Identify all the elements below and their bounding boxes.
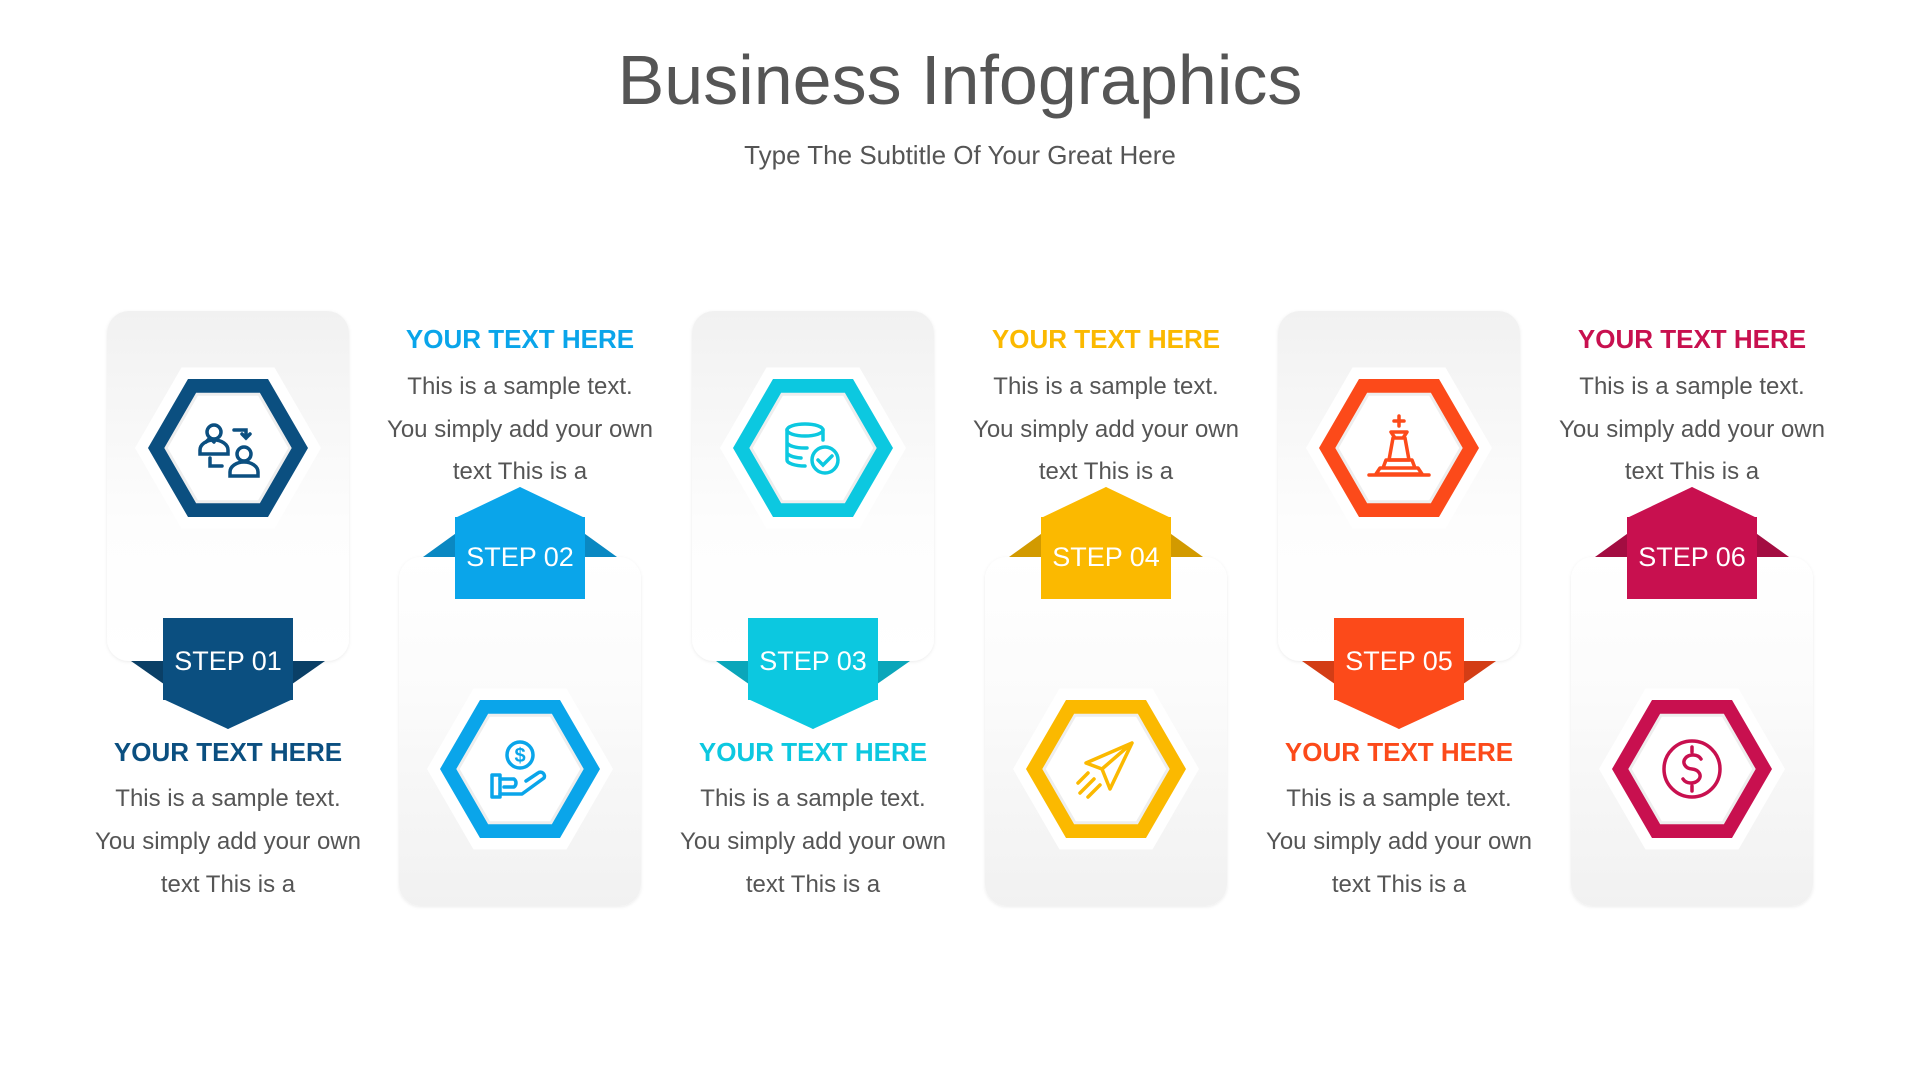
icon: people exchange [200, 425, 258, 476]
text block: text This is a [746, 871, 881, 898]
icon: paper plane [1078, 743, 1132, 797]
text block: This is a sample text. [1579, 373, 1805, 400]
step banner up [1009, 487, 1203, 599]
card [692, 311, 934, 661]
text block: This is a sample text. [700, 785, 926, 812]
text block: You simply add your own [387, 416, 653, 443]
text block: You simply add your own [1266, 828, 1532, 855]
step banner down: STEP 05 [1345, 646, 1453, 676]
text block: You simply add your own [973, 416, 1239, 443]
step banner up [423, 487, 617, 599]
card [985, 557, 1227, 906]
step banner up: STEP 06 [1638, 542, 1746, 572]
panel: step 01 [95, 311, 361, 898]
text block [1266, 737, 1532, 898]
card [1278, 311, 1520, 661]
text block: This is a sample text. [1286, 785, 1512, 812]
panel: step 05 [1266, 311, 1532, 898]
step banner up: STEP 02 [466, 542, 574, 572]
text block: This is a sample text. [115, 785, 341, 812]
text block: This is a sample text. [407, 373, 633, 400]
step banner down: STEP 03 [759, 646, 867, 676]
text block: text This is a [1039, 458, 1174, 485]
subtitle: Type The Subtitle Of Your Great Here [744, 140, 1176, 170]
hexagon icon frame [1013, 688, 1199, 850]
hexagon icon frame [1599, 688, 1785, 850]
icon: hand with coin: $ [514, 745, 526, 767]
text block: text This is a [1625, 458, 1760, 485]
panel: step 02 [387, 324, 653, 906]
text block [680, 737, 946, 898]
step banner up: STEP 04 [1052, 542, 1160, 572]
text block: text This is a [1332, 871, 1467, 898]
card [399, 557, 641, 906]
text block: YOUR TEXT HERE [1285, 737, 1513, 767]
text block [1559, 324, 1825, 485]
step banner down [716, 618, 910, 729]
text block: YOUR TEXT HERE [114, 737, 342, 767]
hexagon icon frame [720, 368, 906, 528]
panel: step 03 [680, 311, 946, 898]
icon: chess king [1369, 416, 1429, 475]
panel: step 06 [1559, 324, 1825, 906]
text block: You simply add your own [1559, 416, 1825, 443]
text block [973, 324, 1239, 485]
step banner up [1595, 487, 1789, 599]
icon: hand with coin [492, 742, 544, 797]
step banner down [131, 618, 325, 729]
card [1571, 557, 1813, 906]
hexagon icon frame [1306, 368, 1492, 528]
hexagon icon frame [135, 368, 321, 528]
text block: You simply add your own [95, 828, 361, 855]
panel: step 04 [973, 324, 1239, 906]
hexagon icon frame [427, 688, 613, 850]
text block: YOUR TEXT HERE [992, 324, 1220, 354]
text block [95, 737, 361, 898]
text block: text This is a [453, 458, 588, 485]
card [107, 311, 349, 661]
text block: YOUR TEXT HERE [406, 324, 634, 354]
icon: database check [787, 424, 838, 473]
text block: text This is a [161, 871, 296, 898]
text block [387, 324, 653, 485]
step banner down: STEP 01 [174, 646, 282, 676]
icon: dollar coin [1664, 741, 1720, 797]
text block: YOUR TEXT HERE [1578, 324, 1806, 354]
step banner down [1302, 618, 1496, 729]
title: Business Infographics [618, 41, 1302, 119]
text block: YOUR TEXT HERE [699, 737, 927, 767]
text block: You simply add your own [680, 828, 946, 855]
text block: This is a sample text. [993, 373, 1219, 400]
